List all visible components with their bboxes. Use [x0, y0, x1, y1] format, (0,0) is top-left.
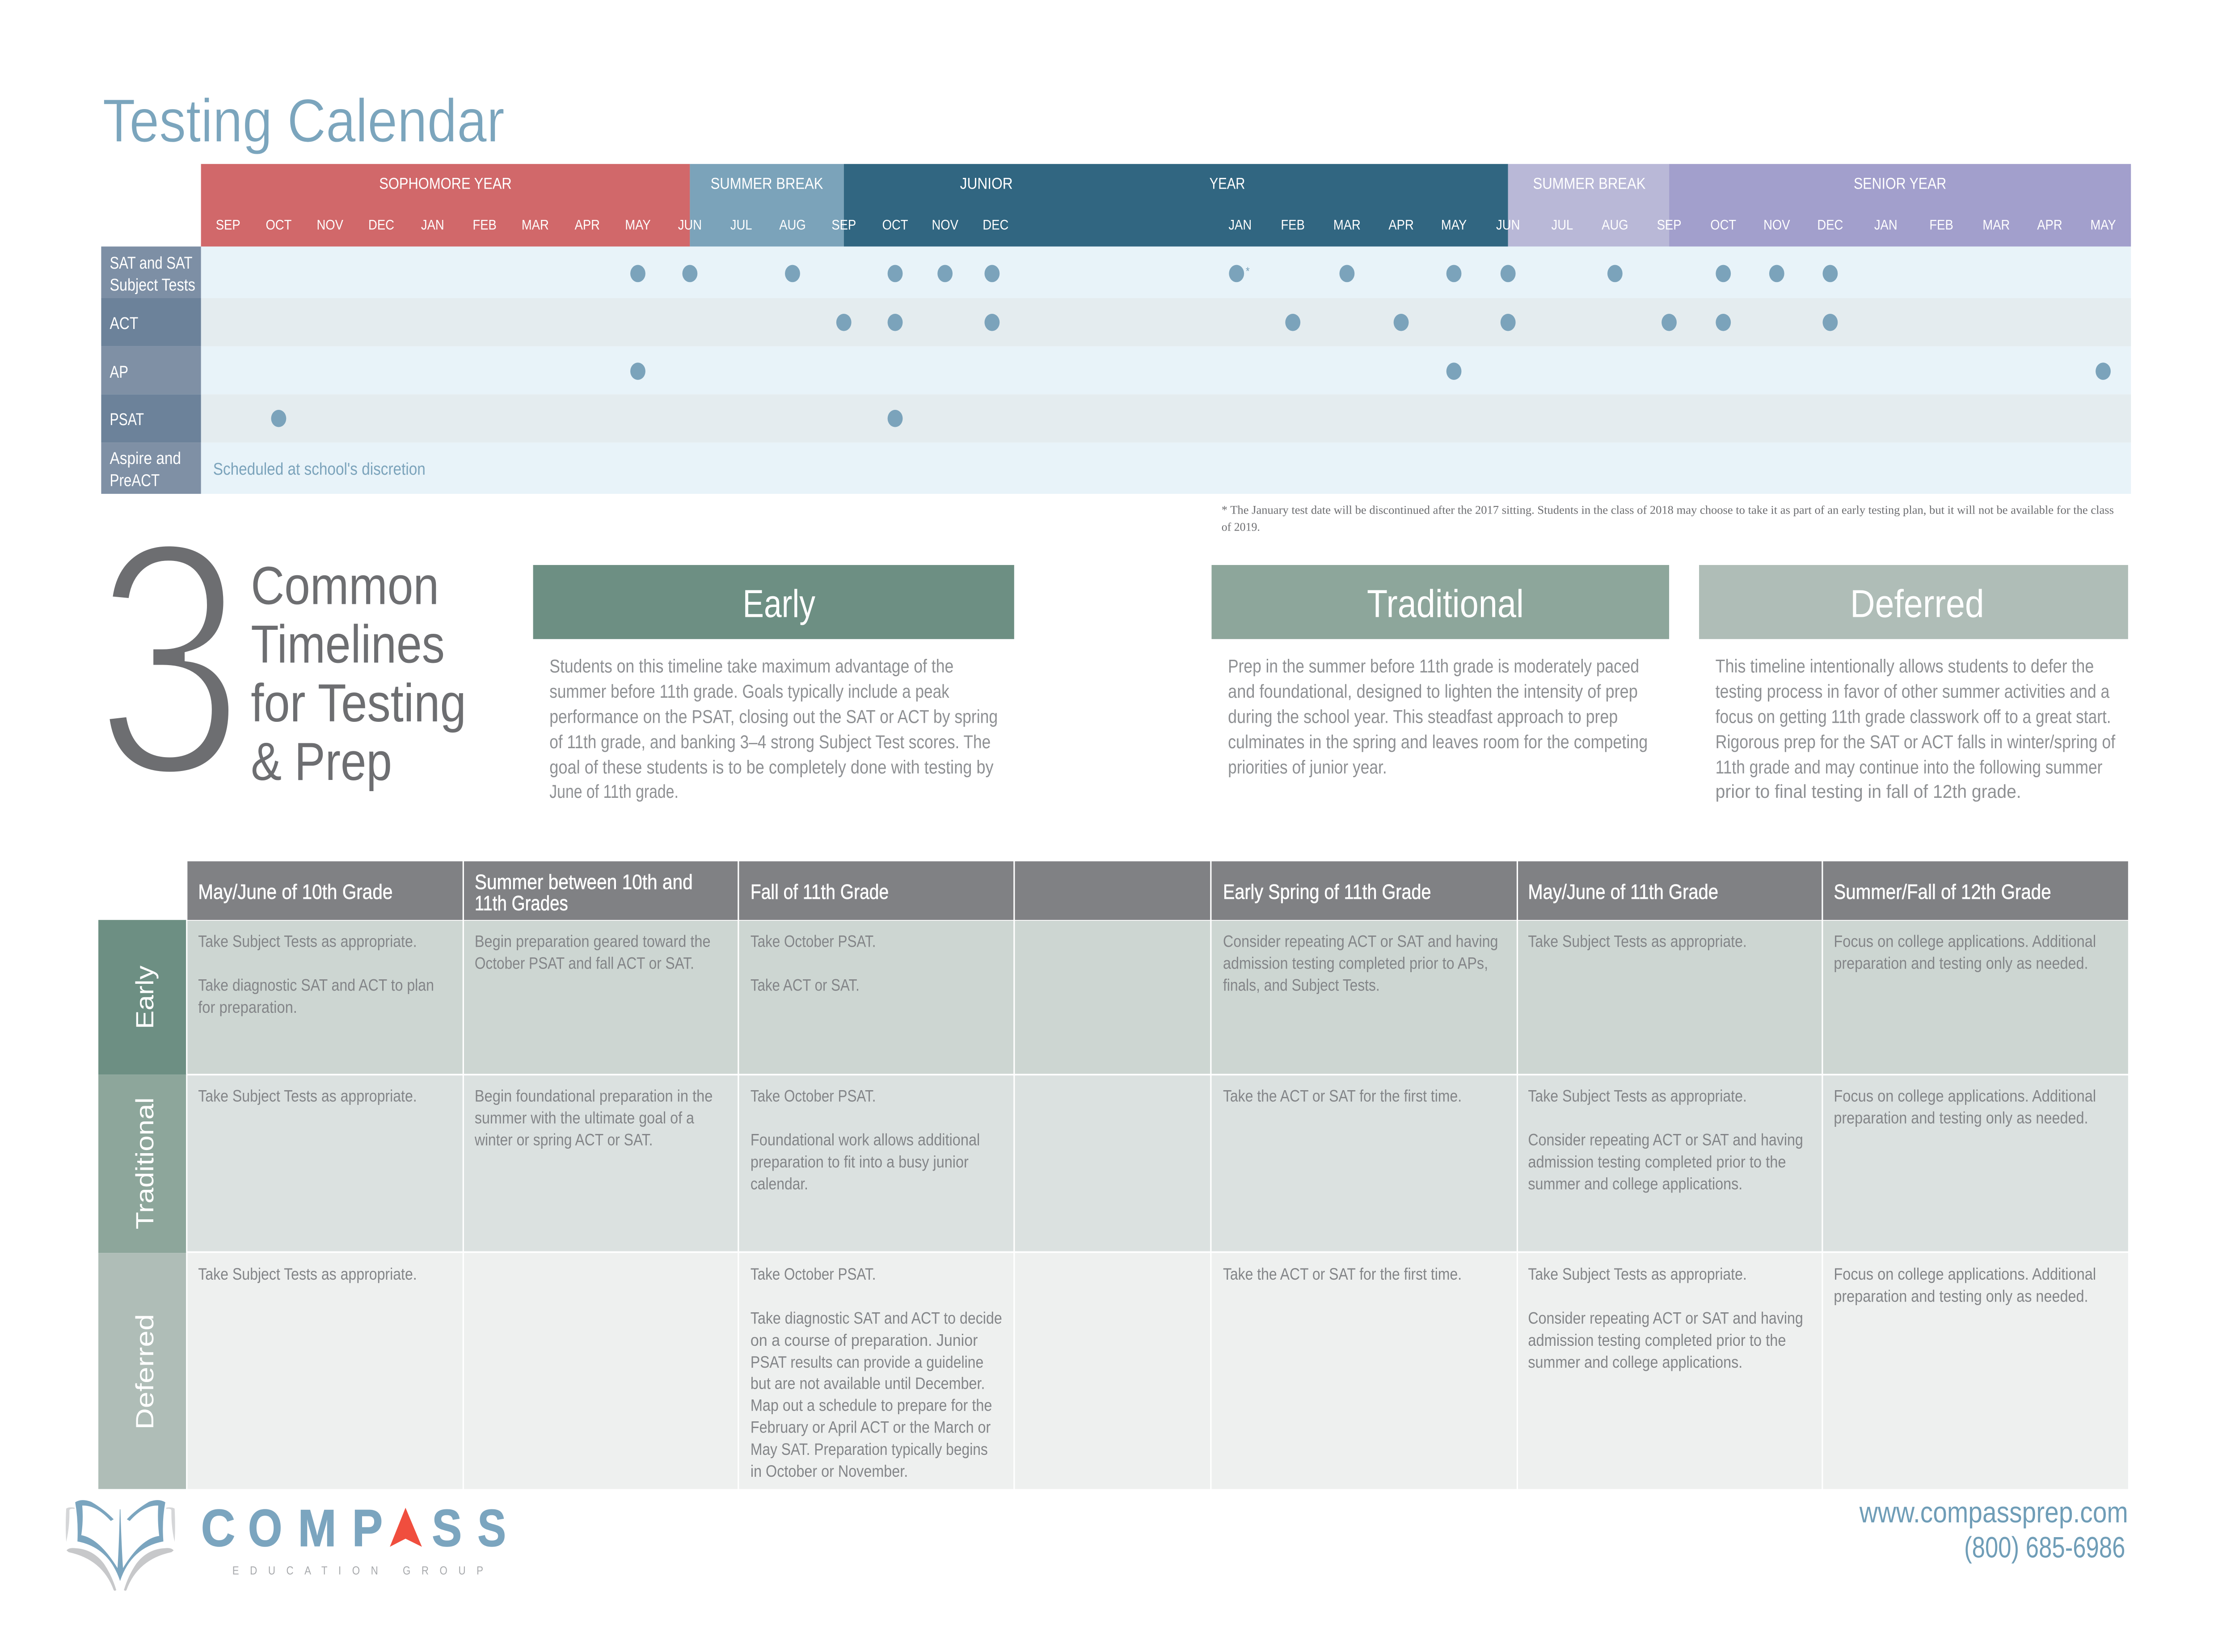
calendar header band: junior year	[844, 164, 1508, 247]
heading: Common Timelines for Testing & Prep: for Testing	[251, 673, 466, 733]
table row: Early: Take Subject Tests as appropriate.	[1528, 932, 1747, 951]
month labels: DEC	[983, 217, 1008, 233]
table row: Early: Take Subject Tests as appropriate.	[198, 932, 417, 951]
table row: Deferred: Focus on college applications. Additional	[1834, 1265, 2096, 1284]
logo wordmark: COMPASS Education Group: S	[477, 1500, 506, 1557]
month labels: MAR	[1982, 217, 2010, 233]
table row: Traditional: calendar.	[751, 1175, 808, 1193]
panel: Early timeline: June of 11th grade.	[549, 781, 679, 802]
month labels	[216, 217, 2116, 233]
row: SAT and SAT Subject Tests: SAT and SAT	[110, 253, 192, 273]
table row: Early: Begin preparation geared toward the	[475, 932, 711, 951]
table row: Traditional: Take Subject Tests as appropriate.	[1528, 1087, 1747, 1105]
contact: website and phone	[1859, 1496, 2128, 1564]
row: SAT and SAT Subject Tests: Subject Tests	[110, 275, 195, 295]
calendar header band: sophomore year: SOPHOMORE YEAR	[379, 175, 512, 192]
month labels: MAY	[625, 217, 651, 233]
table header row: Summer between 10th and	[475, 871, 693, 894]
table row: Deferred: in October or November.	[751, 1462, 908, 1481]
calendar header band: sophomore year	[201, 164, 690, 247]
panel: Early timeline: Early	[742, 582, 815, 626]
table row: Deferred: Take October PSAT.	[751, 1265, 876, 1284]
month labels: FEB	[1929, 217, 1953, 233]
month labels: JAN	[1228, 217, 1252, 233]
table row: Traditional: Take October PSAT.	[751, 1087, 876, 1105]
month labels: MAR	[1333, 217, 1361, 233]
table row: Traditional: Take the ACT or SAT for the first time.	[1223, 1087, 1462, 1105]
month labels: OCT	[1710, 217, 1736, 233]
row label: Deferred: Deferred	[131, 1314, 159, 1429]
logo wordmark: COMPASS Education Group: P	[352, 1500, 383, 1557]
table row: Early: Consider repeating ACT or SAT and having	[1223, 932, 1498, 951]
row: AP: AP	[110, 362, 128, 382]
calendar header band: senior year	[1669, 164, 2131, 247]
heading: Common Timelines for Testing & Prep: Common	[251, 556, 439, 615]
calendar header band: junior year: JUNIOR	[960, 175, 1013, 192]
row: AP	[101, 346, 2131, 394]
table row: Traditional: Consider repeating ACT or SAT and having	[1528, 1131, 1803, 1149]
panel: Deferred timeline: This timeline intentionally allows students to defer the	[1716, 656, 2094, 677]
table row: Traditional: summer and college applications.	[1528, 1175, 1742, 1193]
table row: Early: for preparation.	[198, 998, 297, 1016]
month labels: NOV	[1763, 217, 1790, 233]
table row: Traditional	[187, 1075, 2128, 1252]
panel: Traditional timeline: during the school year. This steadfast approach to prep	[1228, 706, 1618, 727]
table row: Traditional: Begin foundational preparation in the	[475, 1087, 713, 1105]
footnote	[1222, 504, 2114, 534]
row label: Traditional: Traditional	[131, 1097, 159, 1229]
table row: Traditional: Focus on college applications. Additional	[1834, 1087, 2096, 1105]
contact: website and phone: www.compassprep.com	[1859, 1496, 2128, 1529]
heading: big numeral 3: 3	[95, 473, 244, 844]
month labels: MAY	[1441, 217, 1467, 233]
table header row: May/June of 10th Grade	[198, 881, 393, 903]
table row: Traditional: summer with the ultimate goal of a	[475, 1109, 694, 1127]
table row: Deferred: Map out a schedule to prepare for the	[751, 1396, 992, 1415]
table row: Deferred: Take the ACT or SAT for the first time.	[1223, 1265, 1462, 1284]
month labels: AUG	[1602, 217, 1628, 233]
table row: Early	[187, 921, 2128, 1074]
row label: Deferred	[98, 1253, 186, 1489]
month labels: FEB	[1281, 217, 1305, 233]
panel: Deferred timeline: 11th grade and may continue into the following summer	[1716, 757, 2102, 778]
table row: Deferred: preparation and testing only as needed.	[1834, 1287, 2088, 1306]
logo wordmark: COMPASS Education Group: C	[201, 1500, 235, 1557]
table row: Early: October PSAT and fall ACT or SAT.	[475, 954, 694, 973]
table row: Deferred: February or April ACT or the March or	[751, 1418, 991, 1437]
table header row	[187, 861, 2128, 920]
heading: Common Timelines for Testing & Prep: & Prep	[251, 731, 392, 791]
panel: Traditional timeline: Traditional	[1367, 582, 1524, 626]
table row: Traditional: Foundational work allows additional	[751, 1131, 980, 1149]
table row: Early: Take diagnostic SAT and ACT to plan	[198, 976, 434, 995]
row: Aspire and PreACT: Aspire and	[110, 449, 181, 468]
table row: Early: Focus on college applications. Additional	[1834, 932, 2096, 951]
row: Aspire and PreACT	[101, 442, 2131, 494]
month labels: DEC	[368, 217, 394, 233]
month labels: OCT	[266, 217, 291, 233]
row label: Early: Early	[131, 965, 159, 1029]
heading: Common Timelines for Testing & Prep	[251, 556, 466, 791]
table row: Early: admission testing completed prior to APs,	[1223, 954, 1488, 973]
logo wordmark: COMPASS Education Group: A	[390, 1500, 422, 1557]
calendar header band: first summer break: SUMMER BREAK	[711, 175, 823, 192]
row: Aspire and PreACT: Scheduled at school's discretion	[213, 459, 426, 478]
heading: Common Timelines for Testing & Prep: Timelines	[251, 614, 445, 674]
table row: Traditional: preparation and testing only as needed.	[1834, 1109, 2088, 1127]
calendar header band: second summer break: SUMMER BREAK	[1533, 175, 1646, 192]
panel: Early timeline: performance on the PSAT, closing out the SAT or ACT by spring	[549, 706, 998, 727]
panel: Traditional timeline: Prep in the summer before 11th grade is moderately paced	[1228, 656, 1639, 677]
row: Aspire and PreACT: PreACT	[110, 471, 160, 490]
row: SAT and SAT Subject Tests: *	[1246, 265, 1250, 278]
table header row: Summer/Fall of 12th Grade	[1834, 881, 2051, 903]
month labels: APR	[575, 217, 600, 233]
panel: Early timeline	[533, 565, 1014, 802]
month labels: SEP	[1657, 217, 1681, 233]
panel: Traditional timeline: culminates in the spring and leaves room for the competing	[1228, 732, 1648, 752]
table row: Deferred: summer and college applications.	[1528, 1353, 1742, 1371]
month labels: JUN	[678, 217, 702, 233]
row label: Early	[98, 920, 186, 1075]
contact: website and phone: (800) 685-6986	[1964, 1531, 2125, 1564]
month labels: APR	[1388, 217, 1414, 233]
title: Testing Calendar	[103, 87, 505, 155]
table row: Early: Take October PSAT.	[751, 932, 876, 951]
month labels: JUL	[1552, 217, 1573, 233]
month labels: MAY	[2090, 217, 2116, 233]
panel: Early timeline: summer before 11th grade. Goals typically include a peak	[549, 681, 949, 702]
table header row: Fall of 11th Grade	[751, 881, 889, 903]
panel: Deferred timeline: Rigorous prep for the SAT or ACT falls in winter/spring of	[1716, 732, 2115, 752]
row label: Traditional	[98, 1075, 186, 1253]
month labels: OCT	[882, 217, 908, 233]
month labels: APR	[2037, 217, 2062, 233]
month labels: SEP	[831, 217, 856, 233]
calendar header band: junior year: YEAR	[1210, 175, 1245, 192]
month labels: DEC	[1817, 217, 1843, 233]
month labels: JUL	[730, 217, 752, 233]
table: timelines by grade	[98, 861, 2128, 1489]
logo wordmark: COMPASS Education Group: EDUCATION GROUP	[232, 1564, 483, 1577]
row: PSAT	[101, 394, 2131, 442]
table row: Deferred: Take Subject Tests as appropriate.	[1528, 1265, 1747, 1284]
table row: Early: Take ACT or SAT.	[751, 976, 860, 995]
month labels: JAN	[421, 217, 444, 233]
month labels: NOV	[316, 217, 343, 233]
table row: Traditional: preparation to fit into a busy junior	[751, 1153, 969, 1171]
row: ACT: ACT	[110, 314, 138, 333]
table row: Deferred	[187, 1253, 2128, 1489]
panel: Deferred timeline	[1699, 565, 2128, 802]
panel: Traditional timeline: and foundational, designed to lighten the intensity of prep	[1228, 681, 1638, 702]
panel: Traditional timeline	[1211, 565, 1669, 778]
calendar header band: first summer break	[690, 164, 844, 247]
table header row: Early Spring of 11th Grade	[1223, 881, 1431, 903]
icon: open book logo	[66, 1500, 175, 1591]
logo wordmark: COMPASS Education Group	[201, 1500, 506, 1577]
row: ACT	[101, 298, 2131, 346]
table row: Traditional: winter or spring ACT or SAT.	[474, 1131, 653, 1149]
table row: Deferred: Take Subject Tests as appropriate.	[198, 1265, 417, 1284]
month labels: FEB	[473, 217, 497, 233]
month labels: JAN	[1874, 217, 1898, 233]
table header row: May/June of 11th Grade	[1528, 881, 1718, 903]
table row: Early: preparation and testing only as needed.	[1834, 954, 2088, 973]
logo wordmark: COMPASS Education Group: S	[432, 1500, 462, 1557]
calendar header band: senior year: SENIOR YEAR	[1854, 175, 1946, 192]
panel: Deferred timeline: prior to final testing in fall of 12th grade.	[1716, 781, 2021, 802]
month labels: JUN	[1496, 217, 1520, 233]
month labels: AUG	[779, 217, 806, 233]
logo wordmark: COMPASS Education Group: M	[298, 1500, 337, 1557]
table row: Deferred: Consider repeating ACT or SAT and having	[1528, 1309, 1803, 1328]
table row: Deferred: Take diagnostic SAT and ACT to decide	[751, 1309, 1002, 1328]
table row: Traditional: Take Subject Tests as appropriate.	[198, 1087, 417, 1105]
panel: Early timeline: Students on this timeline take maximum advantage of the	[549, 656, 953, 677]
table row: Deferred: admission testing completed prior to the	[1528, 1331, 1786, 1349]
month labels: NOV	[932, 217, 958, 233]
panel: testing calendar	[101, 164, 2131, 494]
logo wordmark: COMPASS Education Group: O	[248, 1500, 282, 1557]
month labels: SEP	[216, 217, 240, 233]
panel: Deferred timeline: testing process in favor of other summer activities and a	[1716, 681, 2109, 702]
panel: Traditional timeline: priorities of junior year.	[1228, 757, 1387, 778]
row: SAT and SAT Subject Tests	[101, 247, 2131, 298]
table row: Deferred: PSAT results can provide a guideline	[751, 1353, 983, 1371]
footnote: * The January test date will be discontinued after the 2017 sitting. Students in the class of 2018 may choose to take it as part of an early testing plan, but it will not be available for the class	[1222, 504, 2114, 517]
table row: Early: finals, and Subject Tests.	[1223, 976, 1380, 995]
panel: Deferred timeline: Deferred	[1850, 582, 1984, 626]
calendar header band: second summer break	[1508, 164, 1669, 247]
table row: Deferred: May SAT. Preparation typically begins	[751, 1440, 988, 1458]
month labels: MAR	[522, 217, 549, 233]
table row: Deferred: on a course of preparation. Junior	[751, 1331, 978, 1349]
row: PSAT: PSAT	[110, 410, 144, 429]
footnote: of 2019.	[1222, 521, 1260, 534]
panel: Early timeline: goal of these students is to be completely done with testing by	[549, 757, 994, 778]
table header row: 11th Grades	[475, 892, 568, 915]
table row: Traditional: admission testing completed prior to the	[1528, 1153, 1786, 1171]
panel: Deferred timeline: focus on getting 11th grade classwork off to a great start.	[1716, 706, 2111, 727]
table row: Deferred: but are not available until December.	[751, 1374, 985, 1393]
panel: Early timeline: of 11th grade, and banking 3–4 strong Subject Test scores. The	[549, 732, 991, 752]
